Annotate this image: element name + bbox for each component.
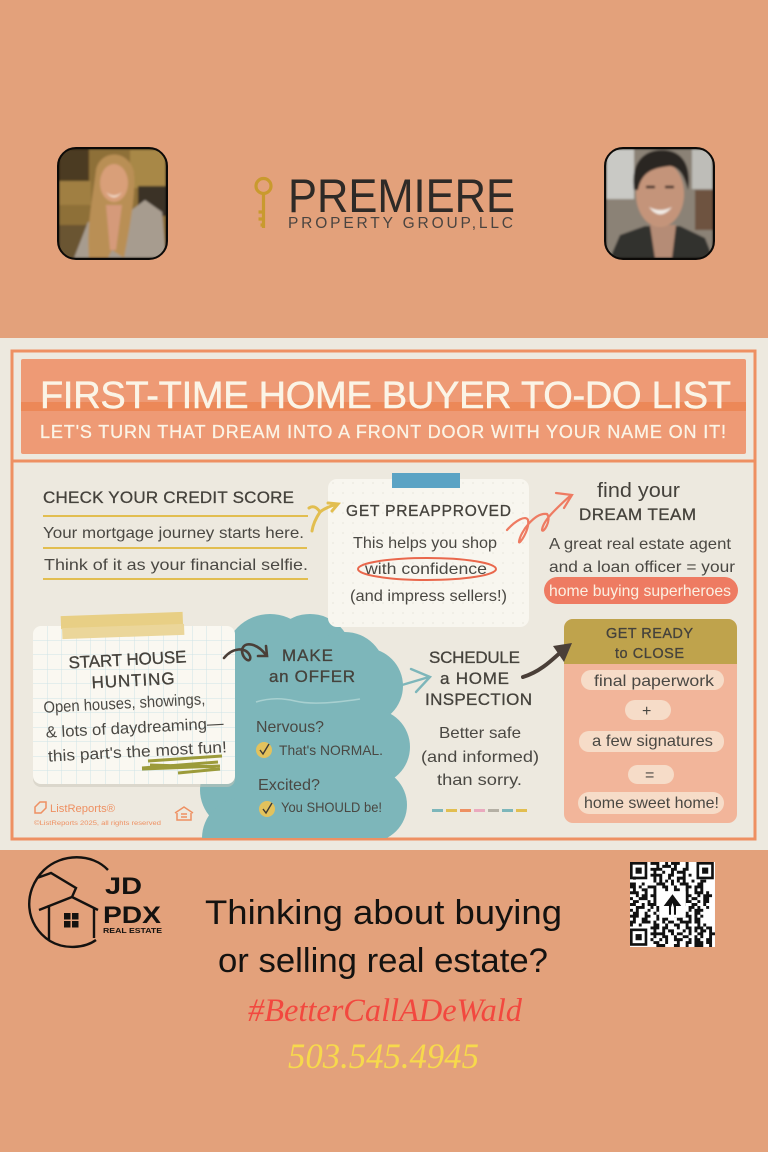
icon: equal housing <box>175 807 193 820</box>
logo: Premiere Property Group: PREMIERE <box>288 169 515 222</box>
card: start house hunting <box>33 612 235 787</box>
pill: equals <box>628 765 674 784</box>
section: find your dream team: A great real estate agent <box>549 536 732 553</box>
section: check your credit score: Your mortgage journey starts here. <box>43 525 304 542</box>
section: check your credit score <box>43 488 308 579</box>
photo: woman agent portrait <box>58 148 167 259</box>
blob panel: make an offer <box>200 614 410 838</box>
card: get ready to close <box>564 619 737 823</box>
footer: ListReports credit <box>34 802 193 827</box>
section: find your dream team: DREAM TEAM <box>579 505 696 524</box>
text: call to action question: Thinking about buying <box>205 894 562 932</box>
QR centre icon <box>659 891 686 918</box>
finder patterns <box>631 863 712 944</box>
card: start house hunting: START HOUSE <box>68 647 187 672</box>
title banner <box>21 359 746 454</box>
section: check your credit score: CHECK YOUR CREDIT SCORE <box>43 488 294 507</box>
photo: man agent portrait <box>605 148 714 259</box>
logo: JD PDX Real Estate: REAL ESTATE <box>103 926 162 935</box>
heading: make an offer: MAKE <box>282 646 333 665</box>
card: start house hunting: Open houses, showings, <box>43 691 206 717</box>
logo: JD PDX Real Estate: JD <box>105 873 142 900</box>
card: start house hunting: HUNTING <box>91 669 175 692</box>
subtitle: LET'S TURN THAT DREAM INTO A FRONT DOOR WITH YOUR NAME ON IT! <box>40 422 726 442</box>
pill: final paperwork: final paperwork <box>594 673 715 690</box>
highlight pill <box>544 577 738 604</box>
pill: final paperwork <box>581 670 724 690</box>
card: get preapproved: This helps you shop <box>353 535 497 552</box>
title: FIRST-TIME HOME BUYER TO-DO LIST <box>40 375 731 417</box>
logo: JD PDX Real Estate: PDX <box>103 902 161 929</box>
blob panel: make an offer: Excited? <box>258 777 320 794</box>
blob panel: make an offer: That's NORMAL. <box>279 742 383 758</box>
icon: check badge <box>256 742 272 758</box>
section: schedule a home inspection: Better safe <box>439 725 521 742</box>
yellow tape <box>61 612 184 639</box>
panel: to-do list poster <box>0 338 768 878</box>
arrow: dark loop to make an offer <box>224 644 267 660</box>
poster frame <box>12 351 755 839</box>
section: schedule a home inspection: INSPECTION <box>425 690 532 709</box>
section: find your dream team <box>544 480 738 604</box>
scribble underline <box>142 756 222 773</box>
blob panel: make an offer: an OFFER <box>269 667 355 686</box>
logo: Premiere Property Group <box>256 169 515 232</box>
text: call to action question: or selling real estate? <box>218 942 548 980</box>
section: find your dream team: home buying superheroes <box>549 583 731 600</box>
section: schedule a home inspection: than sorry. <box>437 772 522 789</box>
arrow: yellow credit to preapproved <box>309 503 338 531</box>
pill: equals: = <box>645 767 654 784</box>
pill: home sweet home: home sweet home! <box>584 795 719 812</box>
QR code <box>630 862 715 947</box>
section: schedule a home inspection <box>421 648 539 810</box>
card: get ready to close: to CLOSE <box>615 646 684 662</box>
icon: gold key <box>256 178 271 228</box>
text: phone number: 503.545.4945 <box>288 1036 479 1076</box>
pill: a few signatures: a few signatures <box>592 733 713 750</box>
card: get preapproved: (and impress sellers!) <box>350 588 507 605</box>
pill: a few signatures <box>579 731 724 752</box>
card: start house hunting: this part's the most fun! <box>48 739 227 766</box>
pill: plus: + <box>642 703 651 720</box>
section: schedule a home inspection: a HOME <box>440 669 509 688</box>
card: get ready to close: GET READY <box>606 626 693 642</box>
logo: Premiere Property Group: PROPERTY GROUP,LLC <box>288 215 513 232</box>
blob panel: make an offer: Nervous? <box>256 719 324 736</box>
section: find your dream team: find your <box>597 480 680 502</box>
dashed colour strip <box>432 809 527 812</box>
section: check your credit score: Think of it as your financial selfie. <box>44 557 308 574</box>
footer: ListReports credit: ©ListReports 2025, all rights reserved <box>34 819 161 827</box>
icon: window <box>64 913 78 928</box>
pill: plus <box>625 700 671 720</box>
card: get preapproved <box>328 473 529 627</box>
callout: circled confidence <box>358 558 496 580</box>
icon: check badge <box>259 801 275 817</box>
blob panel: make an offer: You SHOULD be! <box>281 799 382 815</box>
section: schedule a home inspection: (and informed) <box>421 749 539 766</box>
arrow: dark brush to closing card <box>523 643 572 677</box>
logo: JD PDX Real Estate <box>29 857 162 947</box>
footer: ListReports credit: ListReports® <box>50 803 115 815</box>
section: find your dream team: and a loan officer = your <box>549 559 736 576</box>
card: get preapproved: GET PREAPPROVED <box>346 503 511 520</box>
card: get preapproved: with confidence <box>364 561 487 578</box>
card: start house hunting: & lots of daydreaming— <box>45 715 224 742</box>
text: call to action question <box>205 894 562 980</box>
arrow: teal to inspection <box>402 669 430 692</box>
section: schedule a home inspection: SCHEDULE <box>429 648 520 667</box>
arrow: coral squiggle to dream team <box>507 493 572 542</box>
text: hashtag: #BetterCallADeWald <box>248 993 522 1029</box>
